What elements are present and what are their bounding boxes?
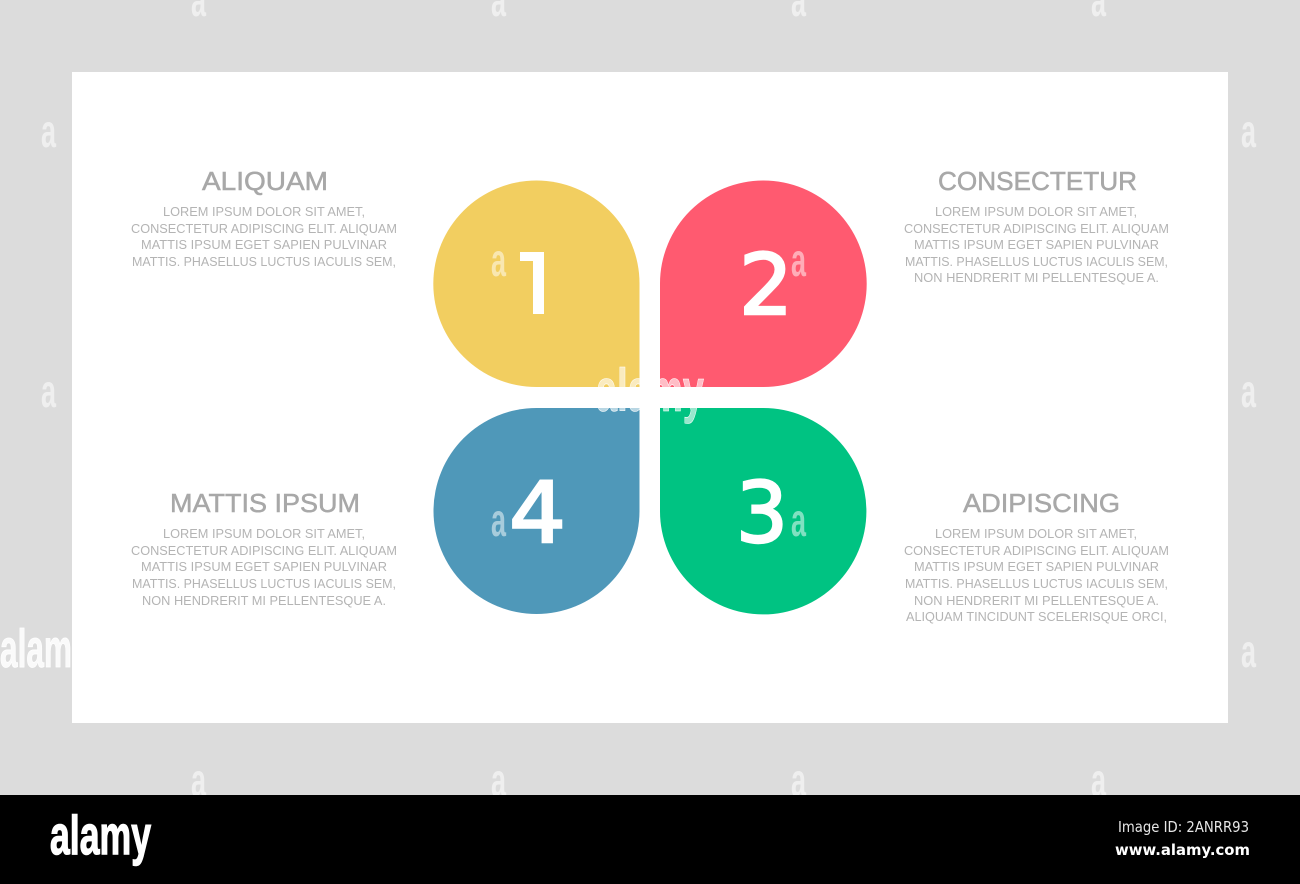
text block: mattis ipsum body: NON HENDRERIT MI PELLENTESQUE A. <box>142 594 386 608</box>
text block: adipiscing body: NON HENDRERIT MI PELLENTESQUE A. <box>914 594 1159 608</box>
alamy logo: alamy <box>50 804 151 866</box>
text block: adipiscing body <box>904 527 1169 624</box>
text block: mattis ipsum body: LOREM IPSUM DOLOR SIT AMET, <box>163 527 365 541</box>
centre gap cross <box>590 360 710 430</box>
footer bar <box>0 795 1300 884</box>
white panel <box>72 72 1228 723</box>
text block: adipiscing body: CONSECTETUR ADIPISCING ELIT. ALIQUAM <box>904 544 1169 558</box>
number 3: 3 <box>736 464 788 562</box>
heading: adipiscing: ADIPISCING <box>963 490 1120 518</box>
watermark marks on grey border: a <box>1241 625 1256 677</box>
text block: consectetur body <box>904 205 1169 285</box>
text block: consectetur body: CONSECTETUR ADIPISCING ELIT. ALIQUAM <box>904 222 1169 236</box>
text block: aliquam body: LOREM IPSUM DOLOR SIT AMET, <box>163 205 365 219</box>
text block: adipiscing body: ALIQUAM TINCIDUNT SCELERISQUE ORCI, <box>906 610 1167 624</box>
petal 4: blue <box>434 408 640 614</box>
heading: mattis ipsum: MATTIS IPSUM <box>170 490 360 518</box>
number 1 <box>520 252 544 314</box>
watermark a: a <box>791 494 806 546</box>
text block: mattis ipsum body: MATTIS. PHASELLUS LUCTUS IACULIS SEM, <box>132 577 396 591</box>
watermark a: a <box>491 494 506 546</box>
panel: mattis ipsum text <box>131 490 397 608</box>
image id: Image ID: 2ANRR93 <box>1118 818 1249 836</box>
petal 2: red <box>660 180 867 387</box>
text block: adipiscing body: MATTIS. PHASELLUS LUCTUS IACULIS SEM, <box>905 577 1168 591</box>
text block: aliquam body <box>131 205 397 269</box>
text block: aliquam body: MATTIS IPSUM EGET SAPIEN PULVINAR <box>141 238 387 252</box>
heading: aliquam: ALIQUAM <box>202 168 328 196</box>
text block: mattis ipsum body: CONSECTETUR ADIPISCING ELIT. ALIQUAM <box>131 544 397 558</box>
text block: consectetur body: MATTIS IPSUM EGET SAPIEN PULVINAR <box>914 238 1159 252</box>
text block: consectetur body: MATTIS. PHASELLUS LUCTUS IACULIS SEM, <box>905 255 1168 269</box>
watermark a: a <box>791 234 806 286</box>
text block: adipiscing body: MATTIS IPSUM EGET SAPIEN PULVINAR <box>914 560 1159 574</box>
watermark marks on grey border: a <box>1091 754 1106 806</box>
text block: mattis ipsum body: MATTIS IPSUM EGET SAPIEN PULVINAR <box>141 560 387 574</box>
heading: consectetur: CONSECTETUR <box>938 168 1137 196</box>
number 1: 1 <box>512 236 558 334</box>
watermark marks on grey border: a <box>491 754 506 806</box>
watermark marks on grey border: a <box>1241 105 1256 157</box>
text block: adipiscing body: LOREM IPSUM DOLOR SIT AMET, <box>935 527 1137 541</box>
watermark marks on grey border: a <box>41 105 56 157</box>
text block: consectetur body: NON HENDRERIT MI PELLENTESQUE A. <box>914 271 1159 285</box>
watermark marks on grey border: a <box>191 754 206 806</box>
watermark marks on grey border: a <box>791 754 806 806</box>
watermark: centre word: alamy <box>596 357 704 424</box>
number 2: 2 <box>739 236 793 334</box>
text block: consectetur body: LOREM IPSUM DOLOR SIT AMET, <box>935 205 1137 219</box>
number 4: 4 <box>509 464 566 562</box>
panel: aliquam text <box>131 168 397 269</box>
text block: mattis ipsum body <box>131 527 397 608</box>
website: www.alamy.com <box>1115 841 1250 859</box>
panel: consectetur text <box>904 168 1169 285</box>
watermark a: a <box>491 234 506 286</box>
watermark marks on grey border: a <box>41 365 56 417</box>
panel: adipiscing text <box>904 490 1169 624</box>
text block: aliquam body: MATTIS. PHASELLUS LUCTUS IACULIS SEM, <box>132 255 396 269</box>
text block: aliquam body: CONSECTETUR ADIPISCING ELIT. ALIQUAM <box>131 222 397 236</box>
petal 1: yellow <box>433 180 640 387</box>
petal 3: green <box>660 408 866 614</box>
watermark: partial word at left edge: alam <box>0 619 72 679</box>
watermark marks on grey border: a <box>1241 365 1256 417</box>
